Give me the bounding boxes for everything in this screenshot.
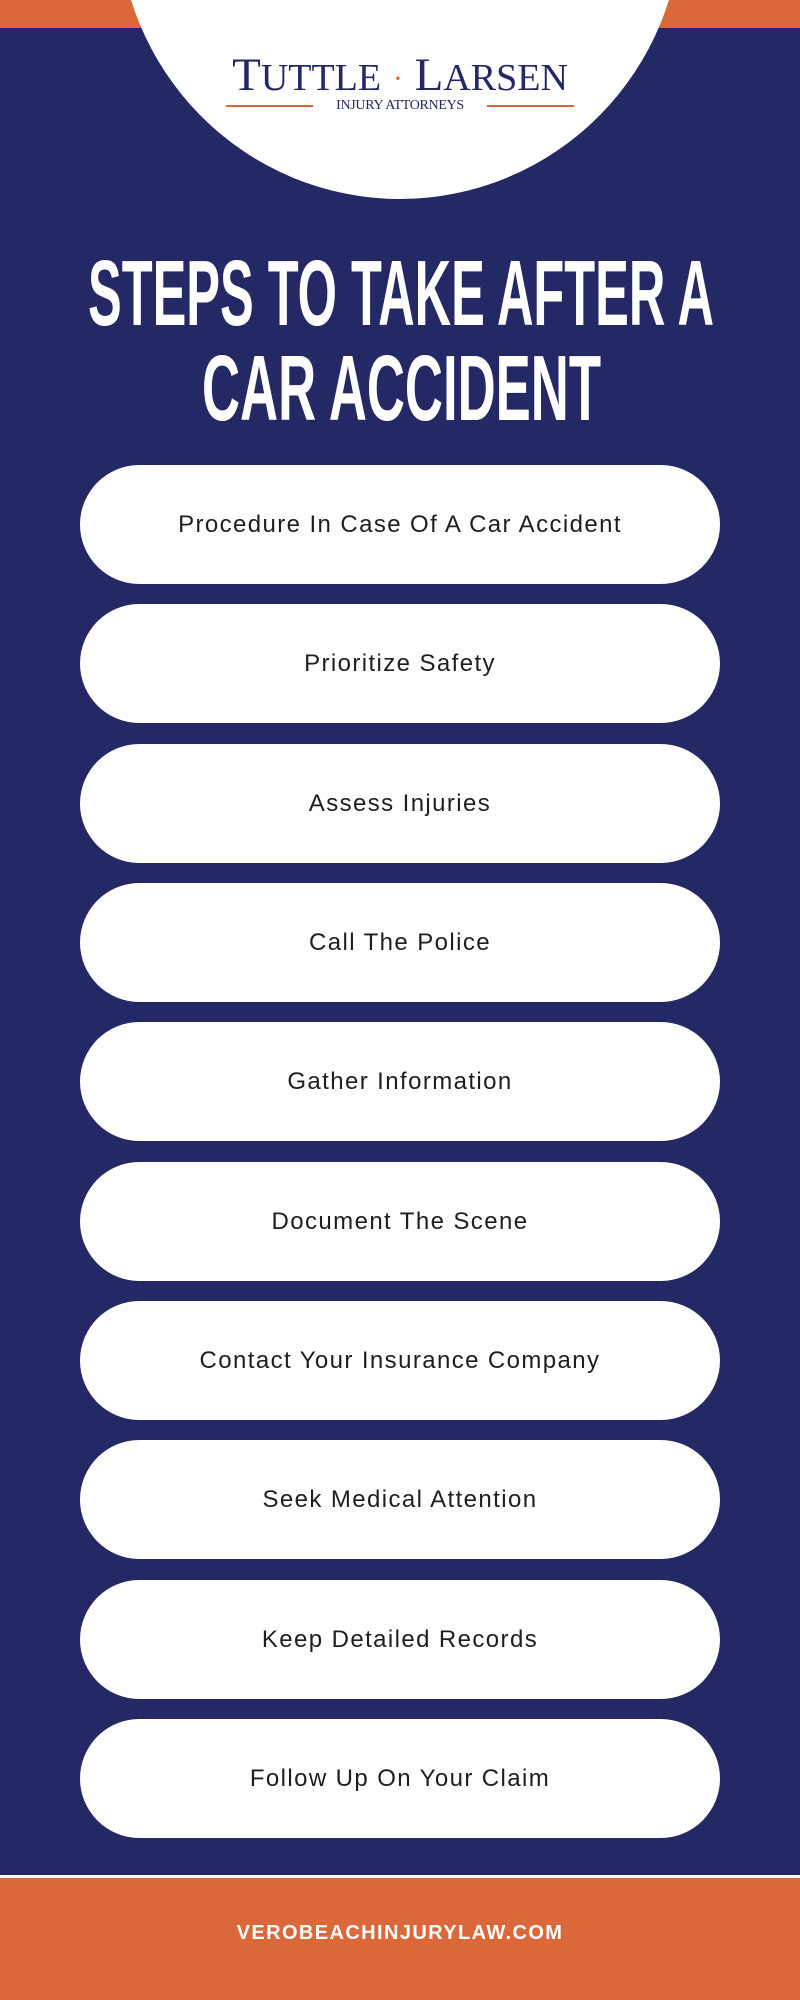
- step 8: Seek Medical Attention: [263, 1486, 537, 1512]
- logo tagline: INJURY ATTORNEYS: [336, 98, 464, 113]
- step 7: [80, 1301, 720, 1420]
- step 8: [80, 1440, 720, 1559]
- step 6: [80, 1162, 720, 1281]
- footer url: VEROBEACHINJURYLAW.COM: [237, 1922, 563, 1944]
- step 5: Gather Information: [287, 1068, 513, 1094]
- logo wordmark: TUTTLE · LARSEN: [232, 49, 568, 101]
- top orange bar: [0, 0, 800, 28]
- step 3: Assess Injuries: [309, 790, 491, 816]
- step 7: Contact Your Insurance Company: [200, 1346, 600, 1374]
- step 4: [80, 883, 720, 1002]
- footer band: [0, 1878, 800, 2000]
- step 6: Document The Scene: [272, 1208, 528, 1234]
- step 9: [80, 1580, 720, 1699]
- step 1: Procedure In Case Of A Car Accident: [178, 510, 622, 538]
- step 5: [80, 1022, 720, 1141]
- step 2: Prioritize Safety: [304, 650, 496, 676]
- logo ellipse: [118, 0, 682, 199]
- step 9: Keep Detailed Records: [262, 1626, 538, 1652]
- step 3: [80, 744, 720, 863]
- step 2: [80, 604, 720, 723]
- step 10: Follow Up On Your Claim: [250, 1764, 550, 1792]
- title: [88, 241, 714, 440]
- footer: [0, 1875, 800, 2000]
- step 1: [80, 465, 720, 584]
- step 4: Call The Police: [309, 928, 491, 956]
- logo: [226, 49, 574, 113]
- step 10: [80, 1719, 720, 1838]
